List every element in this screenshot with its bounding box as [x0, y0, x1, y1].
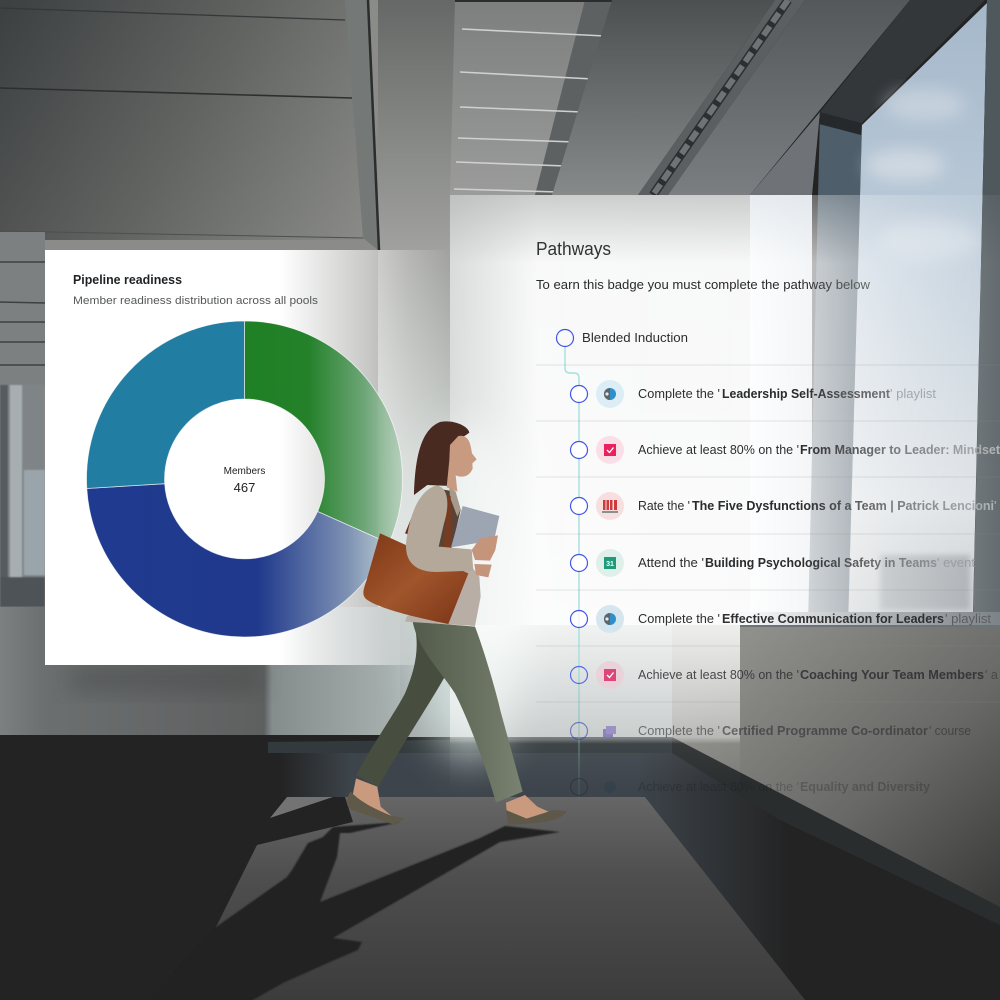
blazer arm	[406, 485, 473, 572]
row 4: event: ' event	[937, 556, 976, 570]
left wall panels	[0, 0, 458, 735]
panel: Pipeline readiness	[45, 250, 450, 665]
shirt and jacket hem	[405, 543, 481, 626]
row 7: course: ' course	[929, 724, 971, 738]
row 4: event: 31	[606, 561, 614, 568]
row 8: assessment (faded): Equality and Diversity	[800, 780, 930, 794]
group row: Blended Induction: Blended Induction	[582, 331, 688, 345]
front leg	[413, 622, 523, 803]
row 4: event: Building Psychological Safety in Teams	[705, 556, 937, 570]
subtitle: To earn this badge you must complete the pathway below	[536, 278, 871, 292]
row 1: playlist: ' playlist	[890, 387, 937, 401]
row 3: rating	[570, 492, 996, 520]
centre value: 467	[234, 480, 255, 495]
row 1: playlist: Leadership Self-Assessment	[722, 387, 891, 401]
front foot	[506, 795, 551, 819]
segment: teal	[87, 321, 245, 488]
donut chart	[87, 321, 403, 637]
row 2: assessment: Achieve at least 80% on the '	[638, 443, 799, 457]
window with frame	[450, 0, 1000, 625]
heading: Pathways: Pathways	[536, 239, 611, 259]
ceiling with blinds and light channel	[450, 0, 985, 195]
row 4: event: Attend the '	[638, 556, 704, 570]
segment: green	[244, 321, 403, 543]
row 6: assessment: ' a	[985, 668, 998, 682]
row 1: playlist: Complete the '	[638, 387, 720, 401]
panel: Pathways	[450, 195, 1000, 800]
row 3: rating: The Five Dysfunctions of a Team | Patrick Lencioni	[692, 499, 994, 513]
row 6: assessment: Coaching Your Team Members	[800, 668, 984, 682]
hands	[472, 535, 498, 577]
person walking with tablet and bag	[347, 421, 567, 825]
back foot	[353, 778, 392, 816]
row 5: playlist: ' playlist	[945, 612, 992, 626]
row dividers	[536, 365, 1000, 702]
row 5: playlist: Effective Communication for Leaders	[722, 612, 944, 626]
segment: blue	[87, 484, 389, 637]
bag	[363, 495, 468, 624]
floor	[150, 737, 1000, 1000]
row 6: assessment	[570, 661, 998, 689]
subtitle: Member readiness distribution across all pools	[73, 295, 319, 307]
row 7: course	[570, 722, 971, 740]
floor shadow of the person	[150, 822, 560, 1000]
connector line	[565, 347, 579, 800]
row 8: assessment (faded)	[570, 778, 930, 796]
lapel	[449, 487, 461, 517]
face and neck	[447, 436, 477, 492]
row 2: assessment: From Manager to Leader: Mindset	[800, 443, 1000, 457]
centre label: Members	[224, 466, 265, 477]
heading: Pipeline readiness: Pipeline readiness	[73, 273, 182, 287]
glow around person	[410, 420, 530, 760]
row 3: rating: Rate the '	[638, 499, 690, 513]
inner jacket shadow	[435, 488, 461, 548]
row 6: assessment: Achieve at least 80% on the '	[638, 668, 799, 682]
sunlit floor patch	[270, 797, 333, 818]
row 2: assessment	[570, 436, 1000, 464]
tablet	[451, 506, 499, 547]
row 3: rating: '	[994, 499, 996, 513]
group row: Blended Induction	[556, 330, 688, 346]
row 7: course: Complete the '	[638, 724, 720, 738]
row 1: playlist	[570, 380, 937, 408]
row 4: event	[570, 549, 976, 577]
row 5: playlist	[570, 605, 992, 633]
row 8: assessment (faded): Achieve at least 80% on the '	[638, 780, 799, 794]
back leg	[356, 627, 447, 787]
row 5: playlist: Complete the '	[638, 612, 720, 626]
row 7: course: Certified Programme Co-ordinator	[722, 724, 928, 738]
lower right wall	[400, 607, 680, 737]
hair	[414, 421, 469, 495]
